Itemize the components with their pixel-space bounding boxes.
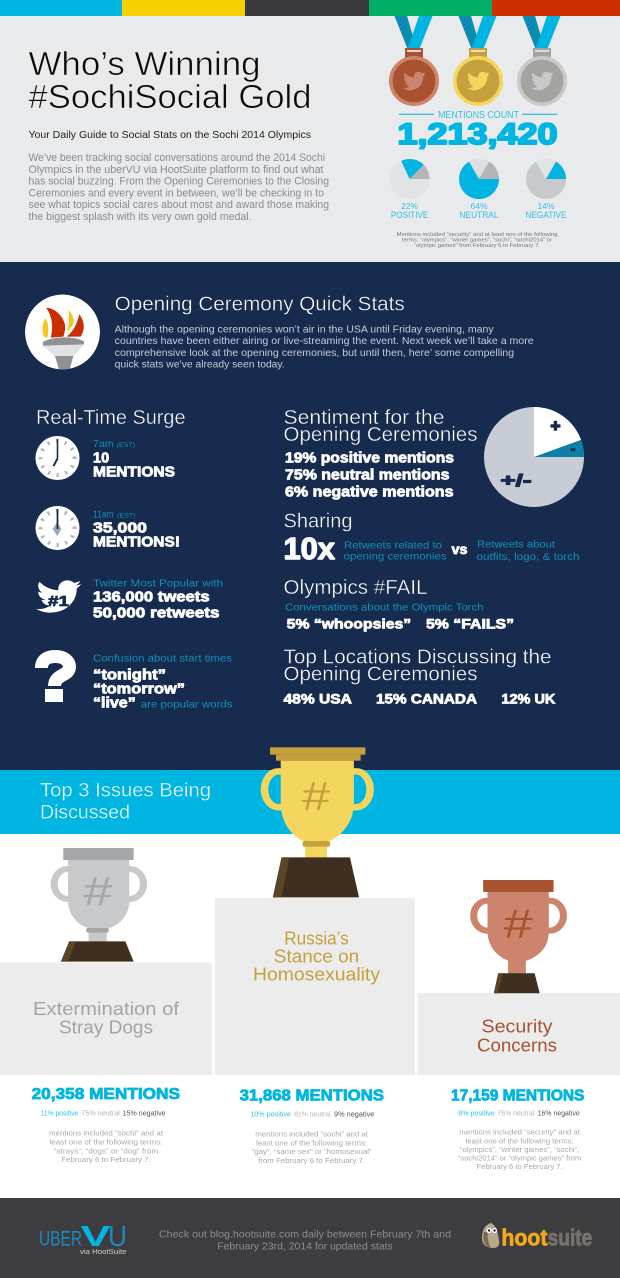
stat: 11am mentions: 35,000 — [93, 520, 147, 536]
icon: question mark — [42, 656, 70, 702]
icon: silver medal — [519, 16, 565, 104]
stats: security mentions: mentions included “security” and at — [459, 1128, 581, 1137]
podium: silver: Stray Dogs — [59, 1017, 153, 1037]
stat: confusion about start times: “live” — [93, 695, 136, 711]
logo: uberVU: UBER — [39, 1228, 82, 1250]
podium: bronze: Concerns — [477, 1036, 557, 1056]
stats: stray dogs mentions — [32, 1086, 180, 1164]
chart: positive pie: POSITIVE — [391, 210, 428, 221]
stats: stray dogs mentions: February 6 to February 7. — [61, 1155, 151, 1164]
footer message: February 23rd, 2014 for updated stats — [217, 1241, 393, 1253]
stat: sharing comparison: 10x — [284, 531, 336, 566]
icon: silver trophy: # — [84, 868, 113, 914]
text block: opening ceremony intro: Although the opening ceremonies won’t air in the USA until Friday evening, many — [115, 324, 495, 335]
title: Who’s Winning — [28, 45, 260, 82]
stats: stray dogs mentions: mentions included “sochi” and at — [49, 1129, 164, 1138]
heading: top locations — [284, 645, 552, 686]
stat: confusion about start times: “tomorrow” — [93, 681, 185, 697]
stats: stray dogs mentions: least one of the following terms: — [50, 1137, 162, 1146]
stat: torch conversations: Conversations about the Olympic Torch — [285, 603, 484, 614]
chart: negative pie — [526, 159, 566, 221]
text block: opening ceremony intro: countries have been either airing or live-streaming the event. Next week we’ll take a more — [115, 336, 534, 347]
mentions count number: 1,213,420 — [398, 118, 558, 151]
stats: homosexuality mentions: from February 6 to February 7. — [258, 1156, 365, 1165]
heading: sentiment for the opening ceremonies: Opening Ceremonies — [284, 423, 478, 446]
footer message — [159, 1229, 451, 1253]
stat: top locations percentages: 12% UK — [501, 690, 555, 706]
olympic colour bar — [0, 0, 620, 16]
stats: homosexuality mentions — [240, 1087, 384, 1165]
stats: security mentions: 16% negative — [538, 1109, 580, 1118]
footnote: mentions criteria: terms: “olympics”, “winter games”, “sochi”, “sochi2014” or — [402, 238, 552, 244]
chart: neutral pie: 64% — [470, 201, 488, 211]
stats: stray dogs mentions: “strays”, “dogs” or “dog” from — [54, 1146, 158, 1155]
stat: 11am mentions: 11am — [93, 509, 114, 520]
heading: sharing: Sharing — [284, 509, 352, 532]
stats: security mentions: “sochi2014” or “olympic games” from — [458, 1154, 581, 1162]
stat: 11am mentions: (EST) — [117, 513, 136, 519]
stat: torch conversations: 5% “FAILS” — [426, 615, 514, 631]
podium: silver: Extermination of — [33, 999, 180, 1019]
panel: footer — [0, 1198, 620, 1278]
icon: clock 11am — [36, 506, 80, 550]
stat: 7am mentions: 10 — [93, 451, 109, 467]
icon: gold trophy — [265, 747, 370, 897]
stat: torch conversations: 5% “whoopsies” — [287, 615, 411, 631]
podium: gold: Russia’s — [284, 928, 349, 948]
stat: top locations percentages: 48% USA — [284, 690, 352, 706]
stat: sharing comparison: outfits, logo, & torch — [476, 552, 580, 563]
icon: silver trophy — [54, 848, 144, 962]
stats: stray dogs mentions: 20,358 MENTIONS — [32, 1086, 180, 1103]
stat: confusion about start times: “tonight” — [93, 667, 166, 683]
heading: sentiment for the opening ceremonies: Sentiment for the — [284, 406, 444, 429]
stat: 7am mentions: (EST) — [117, 443, 135, 449]
stats: homosexuality mentions: 10% positive — [250, 1110, 291, 1119]
icon: gold trophy: # — [302, 773, 330, 819]
stat: 7am mentions: MENTIONS — [93, 465, 175, 481]
stats: security mentions: “olympics”, “winter games”, “sochi”, — [460, 1145, 579, 1154]
chart: negative pie: 14% — [537, 201, 555, 211]
heading: top 3 issues being discussed: Discussed — [40, 802, 130, 824]
icon: torch — [25, 294, 100, 371]
icon: twitter bird with #1 — [36, 580, 81, 613]
stat: twitter most popular: Twitter Most Popular with — [93, 579, 223, 590]
stat list: sentiment percentages: 6% negative mentions — [285, 485, 454, 501]
panel: opening ceremony quick stats — [0, 262, 620, 770]
stats: security mentions: 76% neutral — [497, 1109, 535, 1118]
stat: 11am mentions: MENTIONS! — [93, 535, 180, 551]
logo: uberVU: via HootSuite — [80, 1247, 126, 1256]
podium: bronze — [418, 993, 620, 1075]
heading: top 3 issues being discussed — [40, 780, 211, 824]
intro paragraph: see what topics social cares about most and award those making — [28, 199, 329, 211]
footnote: mentions criteria: “olympic games” from February 6 to February 7. — [414, 243, 540, 249]
stat: twitter most popular: 50,000 retweets — [93, 605, 220, 621]
stat: torch conversations — [285, 603, 514, 631]
title: #SochiSocial Gold — [28, 78, 312, 115]
heading: real-time surge: Real-Time Surge — [36, 407, 186, 429]
podium: gold: Stance on — [274, 947, 359, 967]
heading: olympics #fail: Olympics #FAIL — [284, 576, 428, 599]
chart: neutral pie: NEUTRAL — [460, 210, 498, 221]
stats: homosexuality mentions: 31,868 MENTIONS — [240, 1087, 384, 1104]
podium: silver — [0, 963, 212, 1075]
intro paragraph: We’ve been tracking social conversations around the 2014 Sochi — [28, 152, 325, 164]
stat: confusion about start times — [93, 653, 232, 711]
logo: hootsuite: hoot — [501, 1225, 548, 1251]
stats: security mentions: 8% positive — [458, 1109, 495, 1118]
logo: uberVU — [39, 1221, 127, 1256]
chart: positive pie: 22% — [401, 201, 419, 211]
stat: confusion about start times: Confusion about start times — [93, 653, 232, 664]
stat: 7am mentions — [93, 439, 175, 481]
text block: opening ceremony intro: comprehensive look at the opening ceremonies, but until then, here’ some compelling — [115, 348, 514, 359]
icon: bronze trophy: # — [504, 900, 533, 946]
icon: clock 7am — [36, 436, 80, 480]
logo: hootsuite — [482, 1223, 592, 1251]
stat: sharing comparison — [284, 531, 580, 566]
logo: uberVU: V — [80, 1221, 112, 1253]
stats: stray dogs mentions: 75% neutral — [82, 1109, 120, 1118]
chart: sentiment pie: +/- — [500, 471, 532, 490]
heading: opening ceremony quick stats: Opening Ceremony Quick Stats — [115, 293, 405, 316]
stats: homosexuality mentions: least one of the following terms: — [256, 1138, 367, 1147]
stat: sharing comparison: Retweets related to — [344, 540, 442, 551]
stat: top locations percentages — [284, 690, 555, 706]
icon: bronze trophy — [474, 880, 563, 993]
stat: confusion about start times: are popular words — [141, 699, 232, 710]
stat list: sentiment percentages: 19% positive mentions — [285, 450, 454, 466]
footnote: mentions criteria — [396, 232, 558, 249]
heading: sentiment for the opening ceremonies — [284, 406, 478, 446]
mentions count heading: MENTIONS COUNT — [438, 109, 519, 121]
panel: top 3 issues — [0, 747, 620, 1198]
heading: top locations: Opening Ceremonies — [284, 663, 478, 686]
heading: top locations: Top Locations Discussing the — [284, 645, 552, 668]
title — [28, 45, 312, 115]
stat: sharing comparison: opening ceremonies — [344, 551, 447, 562]
logo: hootsuite: suite — [548, 1225, 592, 1251]
stats: stray dogs mentions: 15% negative — [123, 1109, 166, 1118]
chart: negative pie: NEGATIVE — [526, 210, 566, 221]
subtitle: Your Daily Guide to Social Stats on the Sochi 2014 Olympics — [28, 129, 311, 141]
intro paragraph: Olympics in the uberVU via HootSuite platform to find out what — [28, 164, 324, 176]
podium: gold: Homosexuality — [253, 965, 380, 985]
stats: stray dogs mentions: 11% positive — [41, 1109, 78, 1118]
intro paragraph: has social buzzing. From the Opening Ceremonies to the Closing — [28, 176, 329, 188]
podium: bronze: Security — [482, 1017, 552, 1037]
chart: sentiment pie: + — [551, 416, 561, 436]
podium: gold — [215, 898, 415, 1075]
intro paragraph: the biggest splash with its very own gold medal. — [28, 211, 252, 223]
icon: twitter bird with #1: #1 — [48, 593, 69, 610]
chart: neutral pie — [459, 159, 499, 221]
intro paragraph — [28, 152, 329, 223]
intro paragraph: Ceremonies and every event in between, we’ll be checking in to — [28, 187, 324, 199]
stats: homosexuality mentions: “gay”, “same sex” or “homosexual” — [252, 1147, 372, 1156]
footnote: mentions criteria: Mentions included “security” and at least one of the following — [396, 232, 558, 238]
text block: opening ceremony intro: quick stats we’ve already seen today. — [115, 360, 285, 371]
stats: security mentions: least one of the following terms: — [466, 1136, 574, 1145]
stat: top locations percentages: 15% CANADA — [376, 690, 477, 706]
stat list: sentiment percentages — [285, 450, 454, 501]
icon: bronze medal — [391, 16, 437, 104]
stats: homosexuality mentions: 9% negative — [334, 1110, 374, 1119]
stat list: sentiment percentages: 75% neutral mentions — [285, 467, 450, 483]
logo: uberVU: U — [108, 1221, 127, 1253]
stats: security mentions — [451, 1088, 584, 1171]
stat: twitter most popular — [93, 579, 223, 621]
stats: security mentions: February 6 to February 7. — [477, 1162, 563, 1171]
chart: sentiment pie: - — [571, 440, 576, 456]
stat: twitter most popular: 136,000 tweets — [93, 590, 210, 606]
icon: gold medal — [455, 16, 501, 104]
stats: homosexuality mentions: mentions included “sochi” and at — [255, 1130, 369, 1139]
chart: positive pie — [390, 159, 430, 221]
footer message: Check out blog.hootsuite.com daily between February 7th and — [159, 1229, 451, 1241]
panel: header — [0, 0, 620, 262]
stats: security mentions: 17,159 MENTIONS — [451, 1088, 584, 1105]
stats: homosexuality mentions: 81% neutral — [294, 1110, 331, 1119]
stat: 11am mentions — [93, 509, 180, 551]
stat: sharing comparison: vs — [452, 542, 468, 557]
heading: top 3 issues being discussed: Top 3 Issues Being — [40, 780, 211, 802]
stat: 7am mentions: 7am — [93, 439, 114, 450]
text block: opening ceremony intro — [115, 324, 534, 371]
chart: sentiment pie — [484, 407, 584, 507]
stat: sharing comparison: Retweets about — [477, 540, 555, 551]
